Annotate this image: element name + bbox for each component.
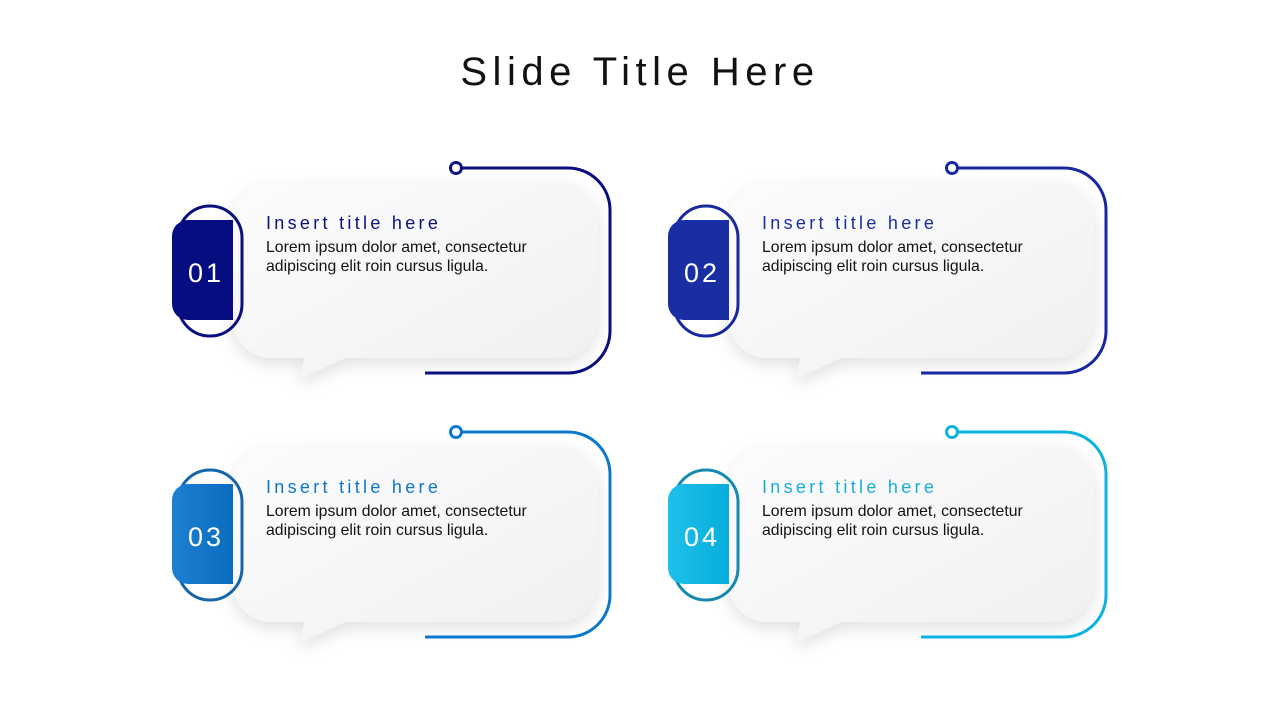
number box bbox=[668, 484, 729, 584]
text block bbox=[762, 213, 1023, 275]
number box bbox=[172, 484, 233, 584]
text block bbox=[762, 477, 1023, 539]
text block bbox=[266, 477, 527, 539]
text block: adipiscing elit roin cursus ligula. bbox=[762, 258, 984, 275]
text block: Lorem ipsum dolor amet, consectetur bbox=[266, 239, 527, 256]
text block: adipiscing elit roin cursus ligula. bbox=[266, 258, 488, 275]
panel: 01 bbox=[172, 162, 610, 380]
text block: Lorem ipsum dolor amet, consectetur bbox=[762, 239, 1023, 256]
text block bbox=[266, 213, 527, 275]
bubble bbox=[232, 446, 598, 644]
number box: 03 bbox=[188, 522, 224, 552]
text block: Lorem ipsum dolor amet, consectetur bbox=[762, 503, 1023, 520]
number box: 04 bbox=[684, 522, 720, 552]
panel: 03 bbox=[172, 426, 610, 644]
number box bbox=[668, 220, 729, 320]
text block: Insert title here bbox=[762, 213, 937, 233]
outline connector bbox=[674, 426, 1106, 637]
text block: adipiscing elit roin cursus ligula. bbox=[762, 522, 984, 539]
title: Slide Title Here bbox=[460, 50, 820, 94]
bubble bbox=[232, 182, 598, 380]
number box bbox=[172, 220, 233, 320]
panel: 04 bbox=[668, 426, 1106, 644]
text block: Lorem ipsum dolor amet, consectetur bbox=[266, 503, 527, 520]
outline connector bbox=[178, 162, 610, 373]
panel: 02 bbox=[668, 162, 1106, 380]
bubble bbox=[728, 446, 1094, 644]
number box: 02 bbox=[684, 258, 720, 288]
text block: Insert title here bbox=[762, 477, 937, 497]
text block: Insert title here bbox=[266, 477, 441, 497]
outline connector bbox=[674, 162, 1106, 373]
outline connector bbox=[178, 426, 610, 637]
bubble bbox=[728, 182, 1094, 380]
text block: adipiscing elit roin cursus ligula. bbox=[266, 522, 488, 539]
number box: 01 bbox=[188, 258, 224, 288]
text block: Insert title here bbox=[266, 213, 441, 233]
